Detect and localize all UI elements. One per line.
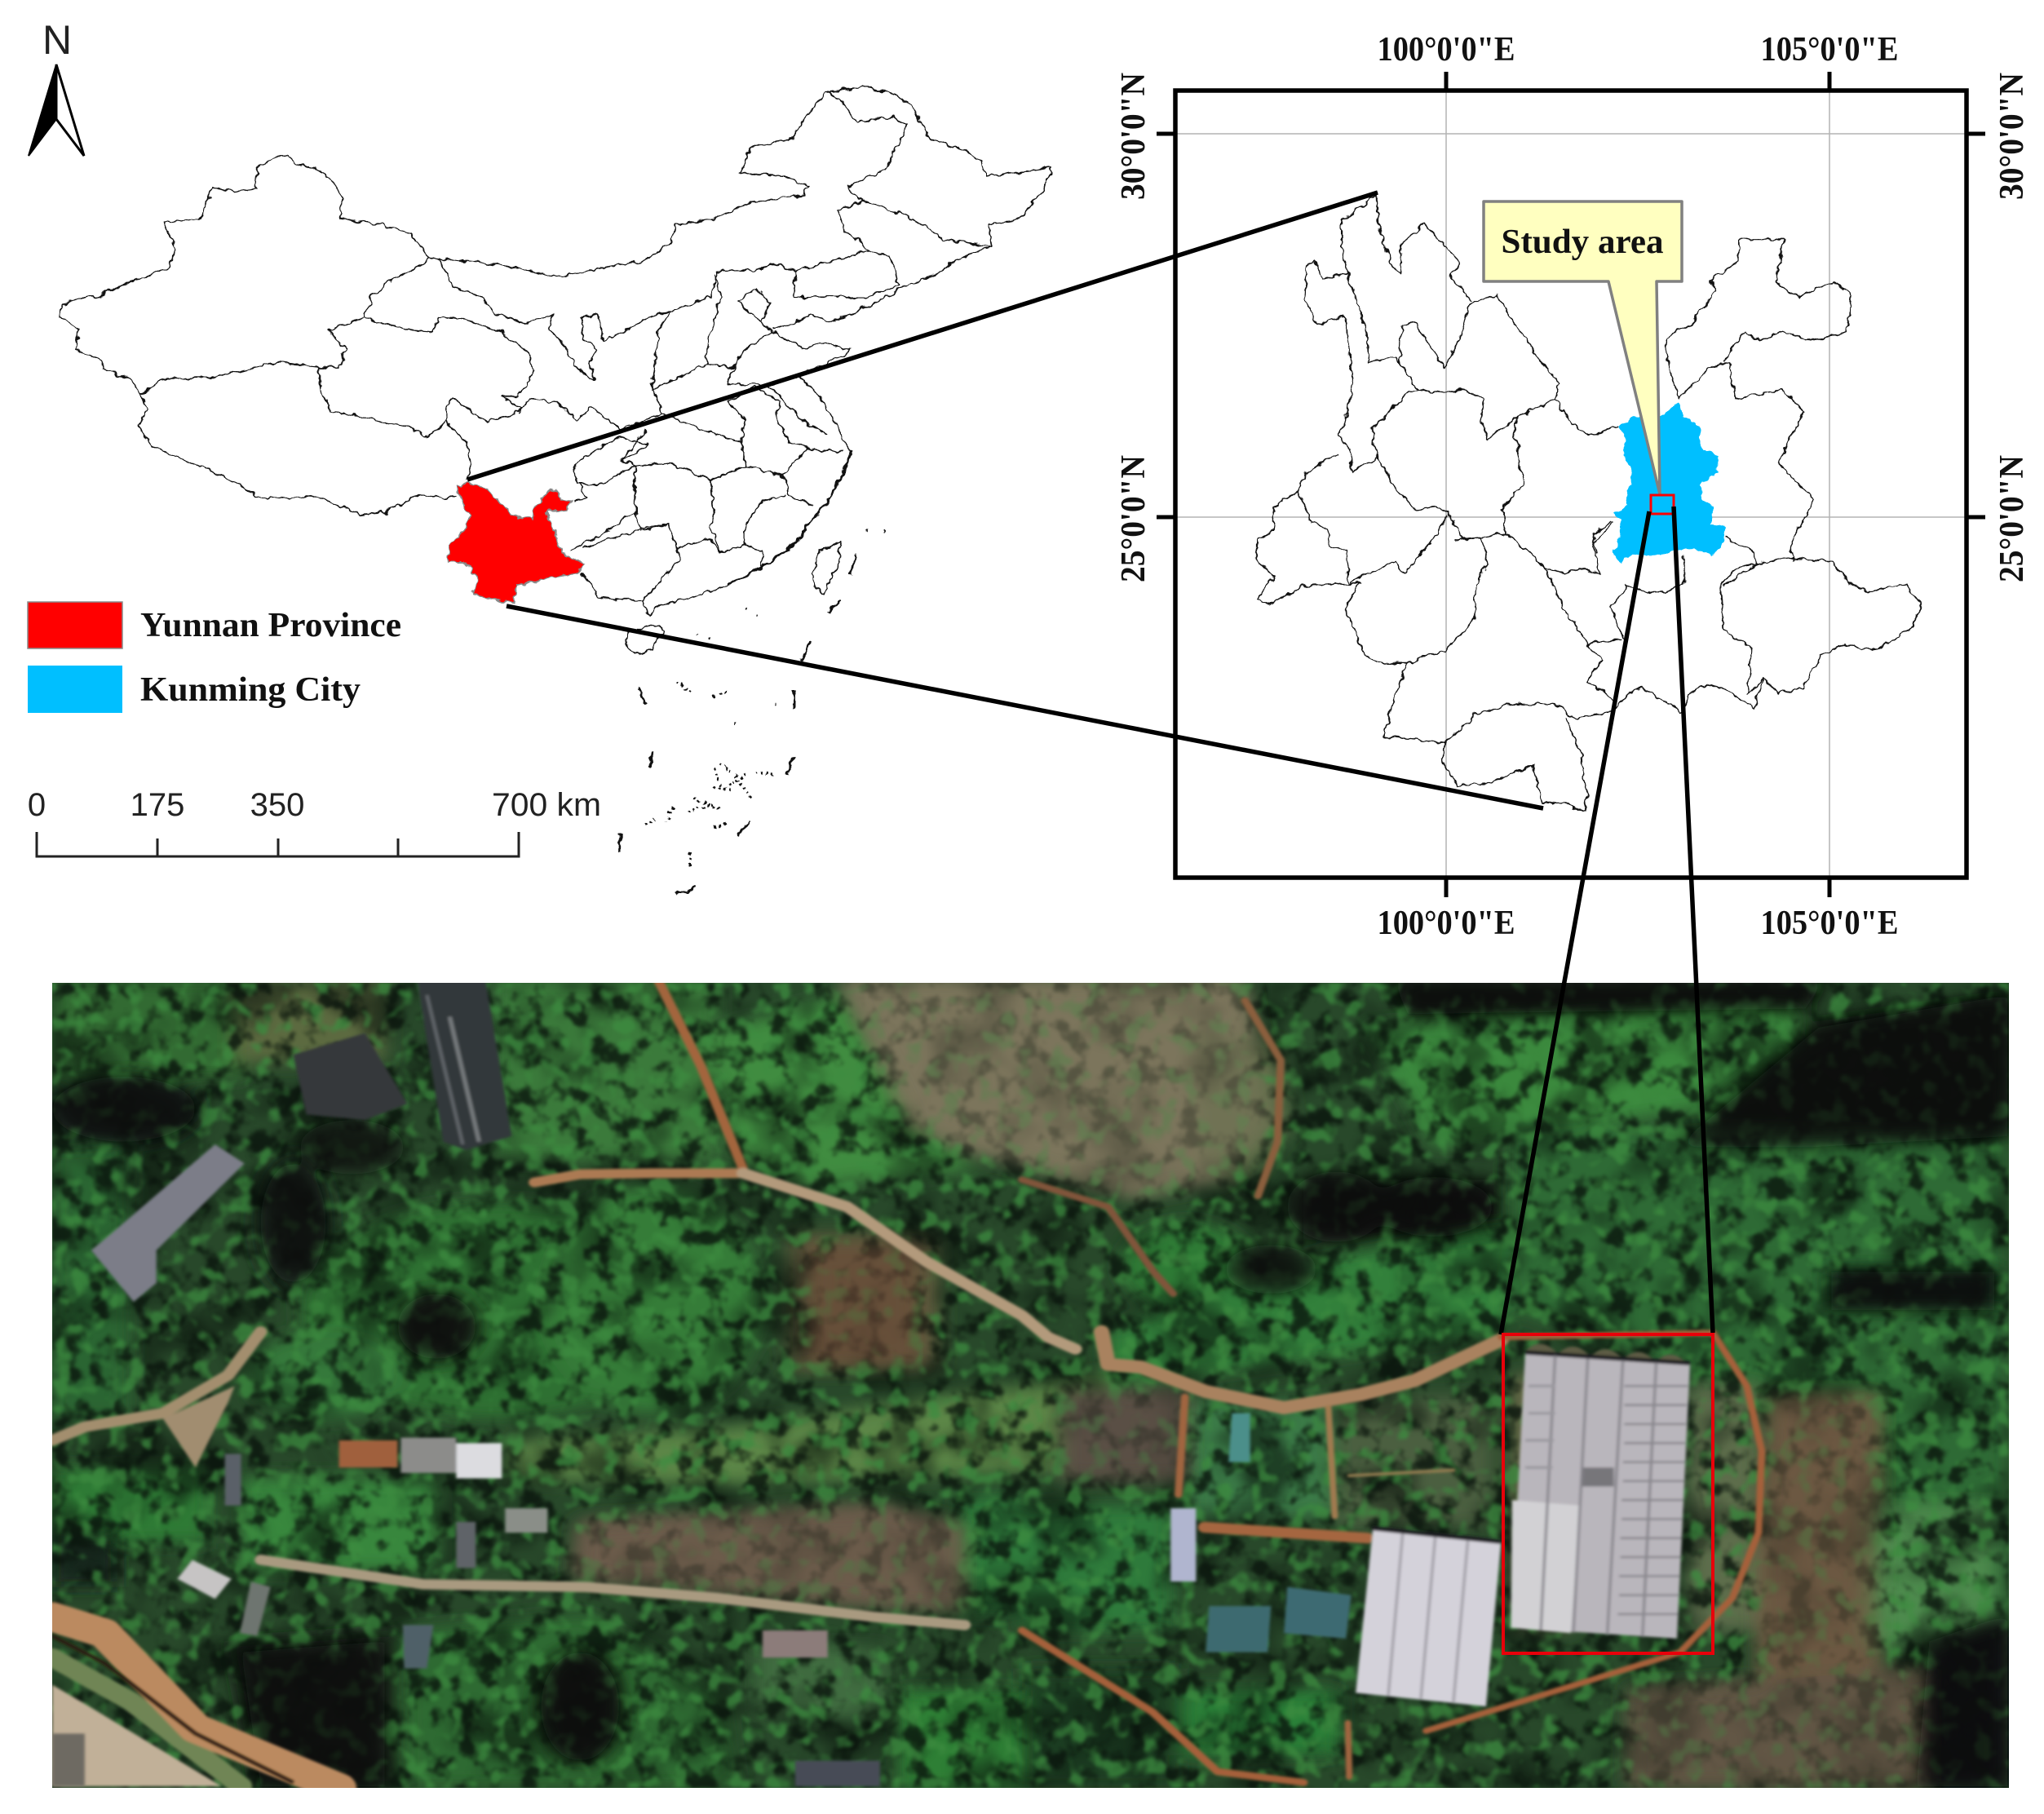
left latitude 25N: 25°0'0"N: [1115, 455, 1153, 582]
prefecture: Chuxiong notch: [1593, 522, 1612, 552]
scale label 700 km: 700 km: [492, 787, 601, 823]
satellite: foliage highlight texture: [52, 983, 2009, 1788]
boundary: Gansu Ningxia: [440, 250, 869, 378]
zoom leader lines: China to Yunnan: [467, 192, 1543, 808]
boundary: Chongqing: [573, 437, 649, 463]
prefecture: Chuxiong south: [1506, 522, 1613, 573]
boundary: Liaoning Hebei: [793, 271, 900, 297]
nine-dash line: [620, 554, 855, 893]
scale label 350: 350: [250, 787, 304, 823]
callout: Study area: [1484, 201, 1682, 494]
legend: Kunming swatch: [28, 666, 122, 713]
right latitude 30N: 30°0'0"N: [1993, 73, 2031, 200]
boundary: Henan Hubei: [622, 431, 841, 480]
axis labels: [1115, 31, 2031, 942]
satellite: upper greenhouse: [1511, 1343, 1690, 1639]
province: Xinjiang: [60, 156, 429, 395]
legend: Kunming label: Kunming City: [140, 671, 361, 709]
prefecture: Xishuangbanna: [1442, 718, 1587, 812]
study area box on satellite image: [1503, 1334, 1713, 1653]
bottom longitude 100E: 100°0'0"E: [1377, 905, 1515, 942]
prefecture: Honghe northeast: [1723, 537, 1757, 586]
scale label 175: 175: [131, 787, 184, 823]
boundary: Hubei Anhui: [741, 443, 745, 466]
boundary: Jiangxi: [710, 480, 786, 554]
South China Sea islands: [645, 530, 883, 868]
boundary: Jiangsu: [769, 384, 827, 434]
province: Shaanxi Shanxi: [653, 312, 755, 443]
study area marker on Yunnan map: [1651, 495, 1674, 514]
legend: Yunnan swatch: [28, 602, 122, 648]
prefecture: Qujing: [1678, 362, 1815, 561]
left latitude 30N: 30°0'0"N: [1115, 73, 1153, 200]
prefecture: Yuxi: [1612, 555, 1684, 638]
prefecture: Wenshan: [1721, 559, 1921, 693]
province: Shanxi Hebei border: [707, 274, 735, 367]
zoom leader lines: Yunnan to satellite: [1501, 507, 1713, 1334]
boundary: Guizhou: [573, 463, 635, 484]
prefecture: Chuxiong: [1555, 399, 1617, 436]
boundary: Hunan Guangxi: [635, 466, 721, 554]
prefecture: Lijiang: [1399, 294, 1560, 439]
prefecture: Dehong: [1257, 491, 1347, 604]
province: Yunnan highlighted: [449, 484, 585, 603]
prefecture: Baoshan: [1299, 454, 1448, 583]
Yunnan inset map frame: [1157, 72, 1985, 897]
boundary: Guizhou south: [570, 513, 635, 551]
boundary: Fujian: [783, 475, 814, 507]
prefecture: Lincang: [1345, 537, 1487, 663]
satellite: bare ground overlays: [573, 980, 1922, 1786]
boundary: Shanxi south: [653, 364, 707, 391]
boundary: Anhui Jiangsu: [755, 387, 810, 449]
island: Hainan: [626, 625, 665, 656]
prefecture: Honghe: [1587, 644, 1614, 700]
boundary: northeast: [827, 92, 906, 285]
thick fractal coastline: [728, 452, 852, 586]
top longitude 105E: 105°0'0"E: [1760, 31, 1899, 69]
boundary: Jilin: [861, 201, 992, 248]
compass north letter: N: [42, 17, 72, 63]
province: Shandong: [728, 332, 852, 384]
satellite image panel: [46, 980, 2009, 1788]
satellite: roads and paths: [52, 980, 1762, 1788]
right latitude 25N: 25°0'0"N: [1993, 455, 2031, 582]
coastline: east and south: [580, 376, 852, 617]
scale label 0: 0: [28, 787, 46, 823]
prefecture: Zhaotong: [1666, 338, 1678, 399]
satellite: vegetation and terrain patches: [46, 980, 2007, 1788]
Yunnan prefectures map: [1257, 193, 1921, 812]
satellite: lower greenhouse: [1356, 1529, 1501, 1706]
boundary: Sichuan Guizhou: [573, 484, 587, 501]
prefecture: Diqing Nujiang: [1305, 193, 1418, 472]
legend: Yunnan label: Yunnan Province: [140, 607, 401, 644]
icon: north arrow: [29, 64, 84, 156]
province: Tibet: [139, 395, 457, 515]
boundary: Gansu south: [519, 399, 662, 430]
top longitude 100E: 100°0'0"E: [1377, 31, 1515, 69]
callout label: Study area: [1501, 223, 1664, 261]
satellite: deep shadow overlays: [52, 980, 2007, 1786]
satellite: river line: [52, 1636, 294, 1782]
prefecture: Dali: [1378, 418, 1524, 540]
boundary: Inner Mongolia north and Heilongjiang: [429, 86, 1052, 330]
island: Taiwan: [812, 542, 841, 595]
China provinces map: [60, 86, 1052, 893]
province: Qinghai: [319, 317, 534, 437]
highlighted Kunming City: [1613, 402, 1727, 564]
bottom longitude 105E: 105°0'0"E: [1760, 905, 1899, 942]
province: Beijing Tianjin: [738, 289, 772, 332]
boundary: Guangdong Fujian: [745, 545, 762, 568]
scale bar: [28, 787, 601, 856]
prefecture: Diqing east: [1377, 193, 1470, 301]
boundary: Guangxi: [584, 524, 679, 600]
boundary: Sichuan west: [446, 423, 471, 480]
prefecture: Puer: [1383, 663, 1763, 742]
prefecture: Zhaotong north: [1666, 239, 1851, 362]
satellite: large-scale shadow variation: [52, 983, 2009, 1788]
satellite: foliage shadow texture: [52, 983, 2009, 1788]
prefecture: Puer east: [1545, 568, 1621, 644]
satellite: buildings and plots: [52, 980, 1352, 1786]
legend: [28, 602, 401, 713]
